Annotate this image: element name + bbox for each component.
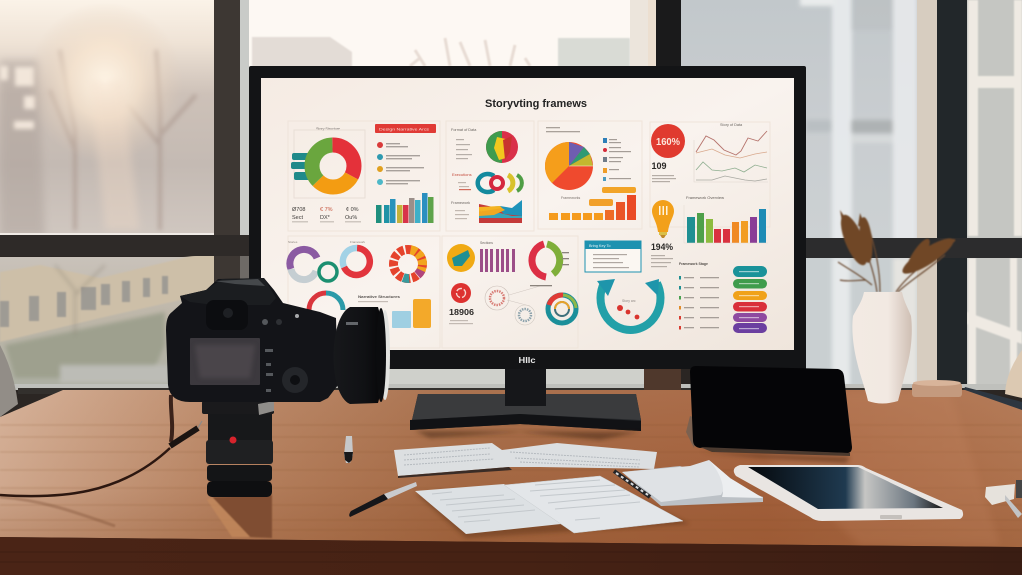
donut stats: € 7% — [320, 207, 333, 213]
papers — [394, 443, 763, 538]
window pane: lower right — [806, 258, 917, 386]
panel: rings row: Stories — [288, 240, 298, 244]
half arc gauge — [309, 293, 343, 310]
line chart — [694, 123, 768, 182]
icon: light bulb — [651, 200, 674, 267]
ring: red and green — [532, 244, 560, 277]
orange bar labels — [589, 187, 636, 206]
window pane: far right — [967, 0, 1022, 388]
ring: green — [319, 263, 337, 281]
circular teal arrow — [597, 279, 660, 330]
donut stats — [292, 207, 359, 221]
panel: small pie and rings — [451, 128, 522, 223]
panel: donut — [291, 127, 365, 222]
callout box — [585, 241, 641, 272]
colored rings — [478, 174, 522, 192]
sunburst — [385, 241, 431, 287]
panel: rings row: Framework — [350, 240, 366, 244]
monitor stand — [410, 368, 641, 440]
icon: yellow circle — [447, 244, 475, 272]
panel: small pie and rings: Framework — [451, 201, 470, 205]
right sheet — [504, 476, 683, 533]
pie legend — [603, 138, 631, 181]
monitor brand: HIIc — [518, 356, 536, 365]
ring: red and blue — [343, 248, 370, 275]
camera display — [190, 338, 260, 385]
camera body — [166, 278, 338, 402]
black tablet on stand — [686, 366, 852, 463]
panel: icons and bars row: Sections — [480, 241, 493, 245]
camera lens — [334, 307, 390, 404]
donut stats: Ou% — [345, 215, 357, 221]
pen: small upright — [344, 436, 353, 463]
panel outlines — [288, 121, 770, 348]
tripod — [202, 401, 274, 497]
pills — [733, 266, 767, 333]
infographic title: Storyvting framews — [485, 98, 587, 110]
panel: list and bars: Design Narrative Arcs — [379, 126, 429, 132]
window pane: lower left building — [0, 250, 216, 384]
panel: framework table with pills: Framework Stage — [679, 262, 708, 266]
stat: 18906: 18906 — [449, 307, 474, 317]
area chart — [479, 200, 522, 223]
orange step bars — [549, 195, 636, 220]
pen: lying — [349, 482, 417, 517]
panel: small pie and rings: Executions — [452, 172, 472, 177]
viewfinder — [206, 300, 248, 330]
vase with dried plants — [836, 210, 958, 404]
circular teal arrow: Story arc — [622, 299, 636, 303]
panel: rings row: Narrative Structures — [358, 295, 400, 299]
camera buttons — [262, 314, 308, 393]
vase — [852, 292, 912, 404]
monitor — [249, 66, 806, 369]
long folded paper — [394, 443, 657, 478]
panel: icons and bars row — [447, 241, 576, 325]
white tablet — [734, 465, 963, 521]
chair edges — [0, 345, 1022, 417]
bar chart — [376, 193, 434, 223]
panel: red percentage badge: 160% — [656, 136, 681, 148]
icon: red circle — [451, 283, 471, 303]
panel: red percentage badge: 109 — [651, 161, 667, 171]
donut stats: Ø708 — [292, 207, 305, 213]
dried plants — [836, 210, 958, 292]
lower pane under monitor — [250, 368, 650, 385]
ring: purple and grey — [290, 249, 317, 280]
left sheet — [415, 484, 561, 534]
donut stats: DX* — [320, 215, 331, 221]
blue block — [392, 311, 411, 328]
tripod shadow on desk — [212, 495, 272, 538]
monitor bezel — [249, 66, 806, 369]
desk accessories — [985, 480, 1022, 518]
sketch circle: pink — [485, 286, 540, 310]
window pane: upper left — [0, 0, 216, 236]
table rows — [679, 276, 719, 330]
donut stats: ¢ 0% — [346, 207, 359, 213]
wooden desk — [0, 387, 1022, 575]
donut stats: Sect — [292, 215, 303, 221]
red header — [375, 124, 436, 133]
panel: small pie and rings: Format of Data — [451, 128, 477, 132]
ring: concentric — [548, 295, 576, 323]
donut tabs — [291, 153, 318, 180]
bar chart: right: Framework Overview — [686, 196, 724, 200]
panel: red percentage badge — [651, 124, 685, 182]
bar chart: right — [684, 196, 768, 243]
panel: rings row — [288, 240, 431, 328]
camera strap — [0, 395, 202, 526]
panel: list and bars — [375, 124, 436, 223]
panel: donut: Story Structure — [316, 127, 340, 131]
screen — [261, 78, 794, 350]
window pane: upper centre — [248, 0, 650, 68]
purple bars — [480, 249, 515, 272]
panel: pie chart — [545, 127, 636, 220]
panel: framework table with pills — [679, 262, 767, 333]
small pie — [486, 131, 518, 163]
icon: light bulb: 194% — [651, 242, 673, 252]
donut chart — [312, 145, 354, 187]
callout box: Bring Key To — [589, 244, 610, 248]
window frames — [0, 0, 1022, 394]
bullet list — [377, 142, 424, 185]
pie chart — [545, 142, 593, 190]
camera — [0, 278, 390, 526]
paper shadows — [415, 493, 690, 538]
window pane: upper right glass building — [681, 0, 917, 244]
wooden cylinder — [912, 380, 962, 397]
line chart: Story of Data — [720, 123, 743, 127]
notebook — [614, 460, 763, 506]
orange block — [413, 299, 431, 328]
panel: pie chart: Frameworks — [561, 196, 581, 200]
sketch circle: blue — [515, 305, 535, 325]
